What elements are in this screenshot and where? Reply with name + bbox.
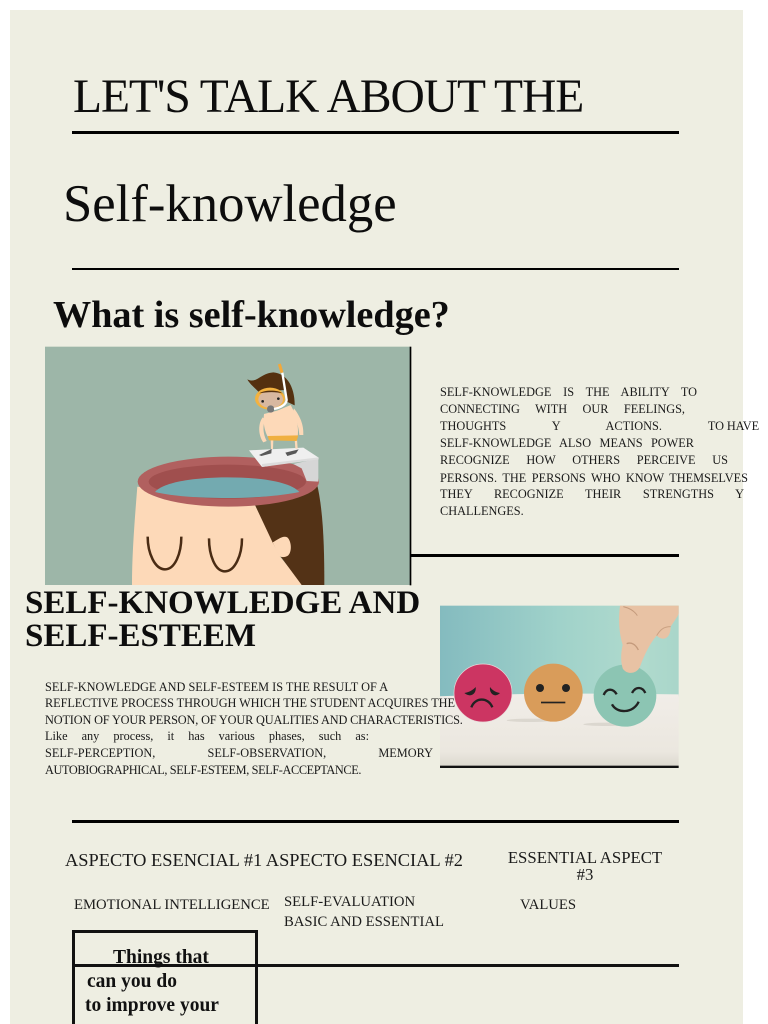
essential aspect values: SELF-EVALUATION [284,894,415,910]
heading: self-knowledge: Self-knowledge [63,175,397,233]
text block: self-esteem explanation: NOTION OF YOUR PERSON, OF YOUR QUALITIES AND CHARACTERISTICS. [45,713,463,727]
box text: to improve your [85,995,219,1016]
text block: self-esteem explanation: SELF-PERCEPTION, SELF-OBSERVATION, MEMORY [45,746,433,760]
text block: self-esteem explanation: Like any process, it has various phases, such as: [45,729,369,743]
hair [255,483,324,585]
essential aspect values: EMOTIONAL INTELLIGENCE [74,897,270,913]
essential aspect headings: ESSENTIAL ASPECT [508,848,662,867]
box text: can you do [87,971,177,992]
text block: definition of self-knowledge: CHALLENGES. [440,504,524,518]
heading: self-knowledge and self-esteem: SELF-KNOWLEDGE AND [25,585,420,621]
head skin [132,487,303,585]
essential aspect values: BASIC AND ESSENTIAL [284,914,444,930]
hand [619,606,679,673]
text block: definition of self-knowledge: RECOGNIZE HOW OTHERS PERCEIVE US [440,453,728,467]
heading: self-knowledge and self-esteem: SELF-ESTEEM [25,618,256,654]
essential aspect headings: ASPECTO ESENCIAL #1 ASPECTO ESENCIAL #2 [65,850,463,870]
box: things that can you do [72,930,258,1024]
ear [273,537,291,557]
heading: self-knowledge and self-esteem [25,585,420,654]
text block: definition of self-knowledge: PERSONS. THE PERSONS WHO KNOW THEMSELVES [440,471,748,485]
text block: definition of self-knowledge: SELF-KNOWLEDGE IS THE ABILITY TO [440,385,697,399]
sad face [454,664,512,722]
brain rim [138,457,319,507]
text block: definition of self-knowledge: TO HAVE [708,419,759,433]
text block: self-esteem explanation: SELF-KNOWLEDGE AND SELF-ESTEEM IS THE RESULT OF A [45,680,388,694]
title: let's talk about the: LET'S TALK ABOUT THE [73,71,583,123]
diving board [293,458,318,482]
text block: self-esteem explanation: REFLECTIVE PROCESS THROUGH WHICH THE STUDENT ACQUIRES THE [45,696,455,710]
closed eyes [148,537,181,569]
text block: definition of self-knowledge: SELF-KNOWLEDGE ALSO MEANS POWER [440,436,694,450]
essential aspect values: VALUES [520,897,576,913]
box text: Things that [113,947,209,968]
heading: what is self-knowledge: What is self-knowledge? [53,294,450,336]
text block: self-esteem explanation: AUTOBIOGRAPHICAL, SELF-ESTEEM, SELF-ACCEPTANCE. [45,763,361,777]
photo: three emotion faces [440,606,679,768]
text block: definition of self-knowledge: CONNECTING WITH OUR FEELINGS, [440,402,685,416]
happy face [594,665,656,727]
text block: definition of self-knowledge: THOUGHTS Y ACTIONS. [440,419,662,433]
essential aspect headings: #3 [577,865,593,884]
neutral face [524,664,583,722]
diver [271,439,273,449]
text block: definition of self-knowledge: THEY RECOGNIZE THEIR STRENGTHS Y [440,487,744,501]
illustration: person diving into own head [45,346,412,586]
